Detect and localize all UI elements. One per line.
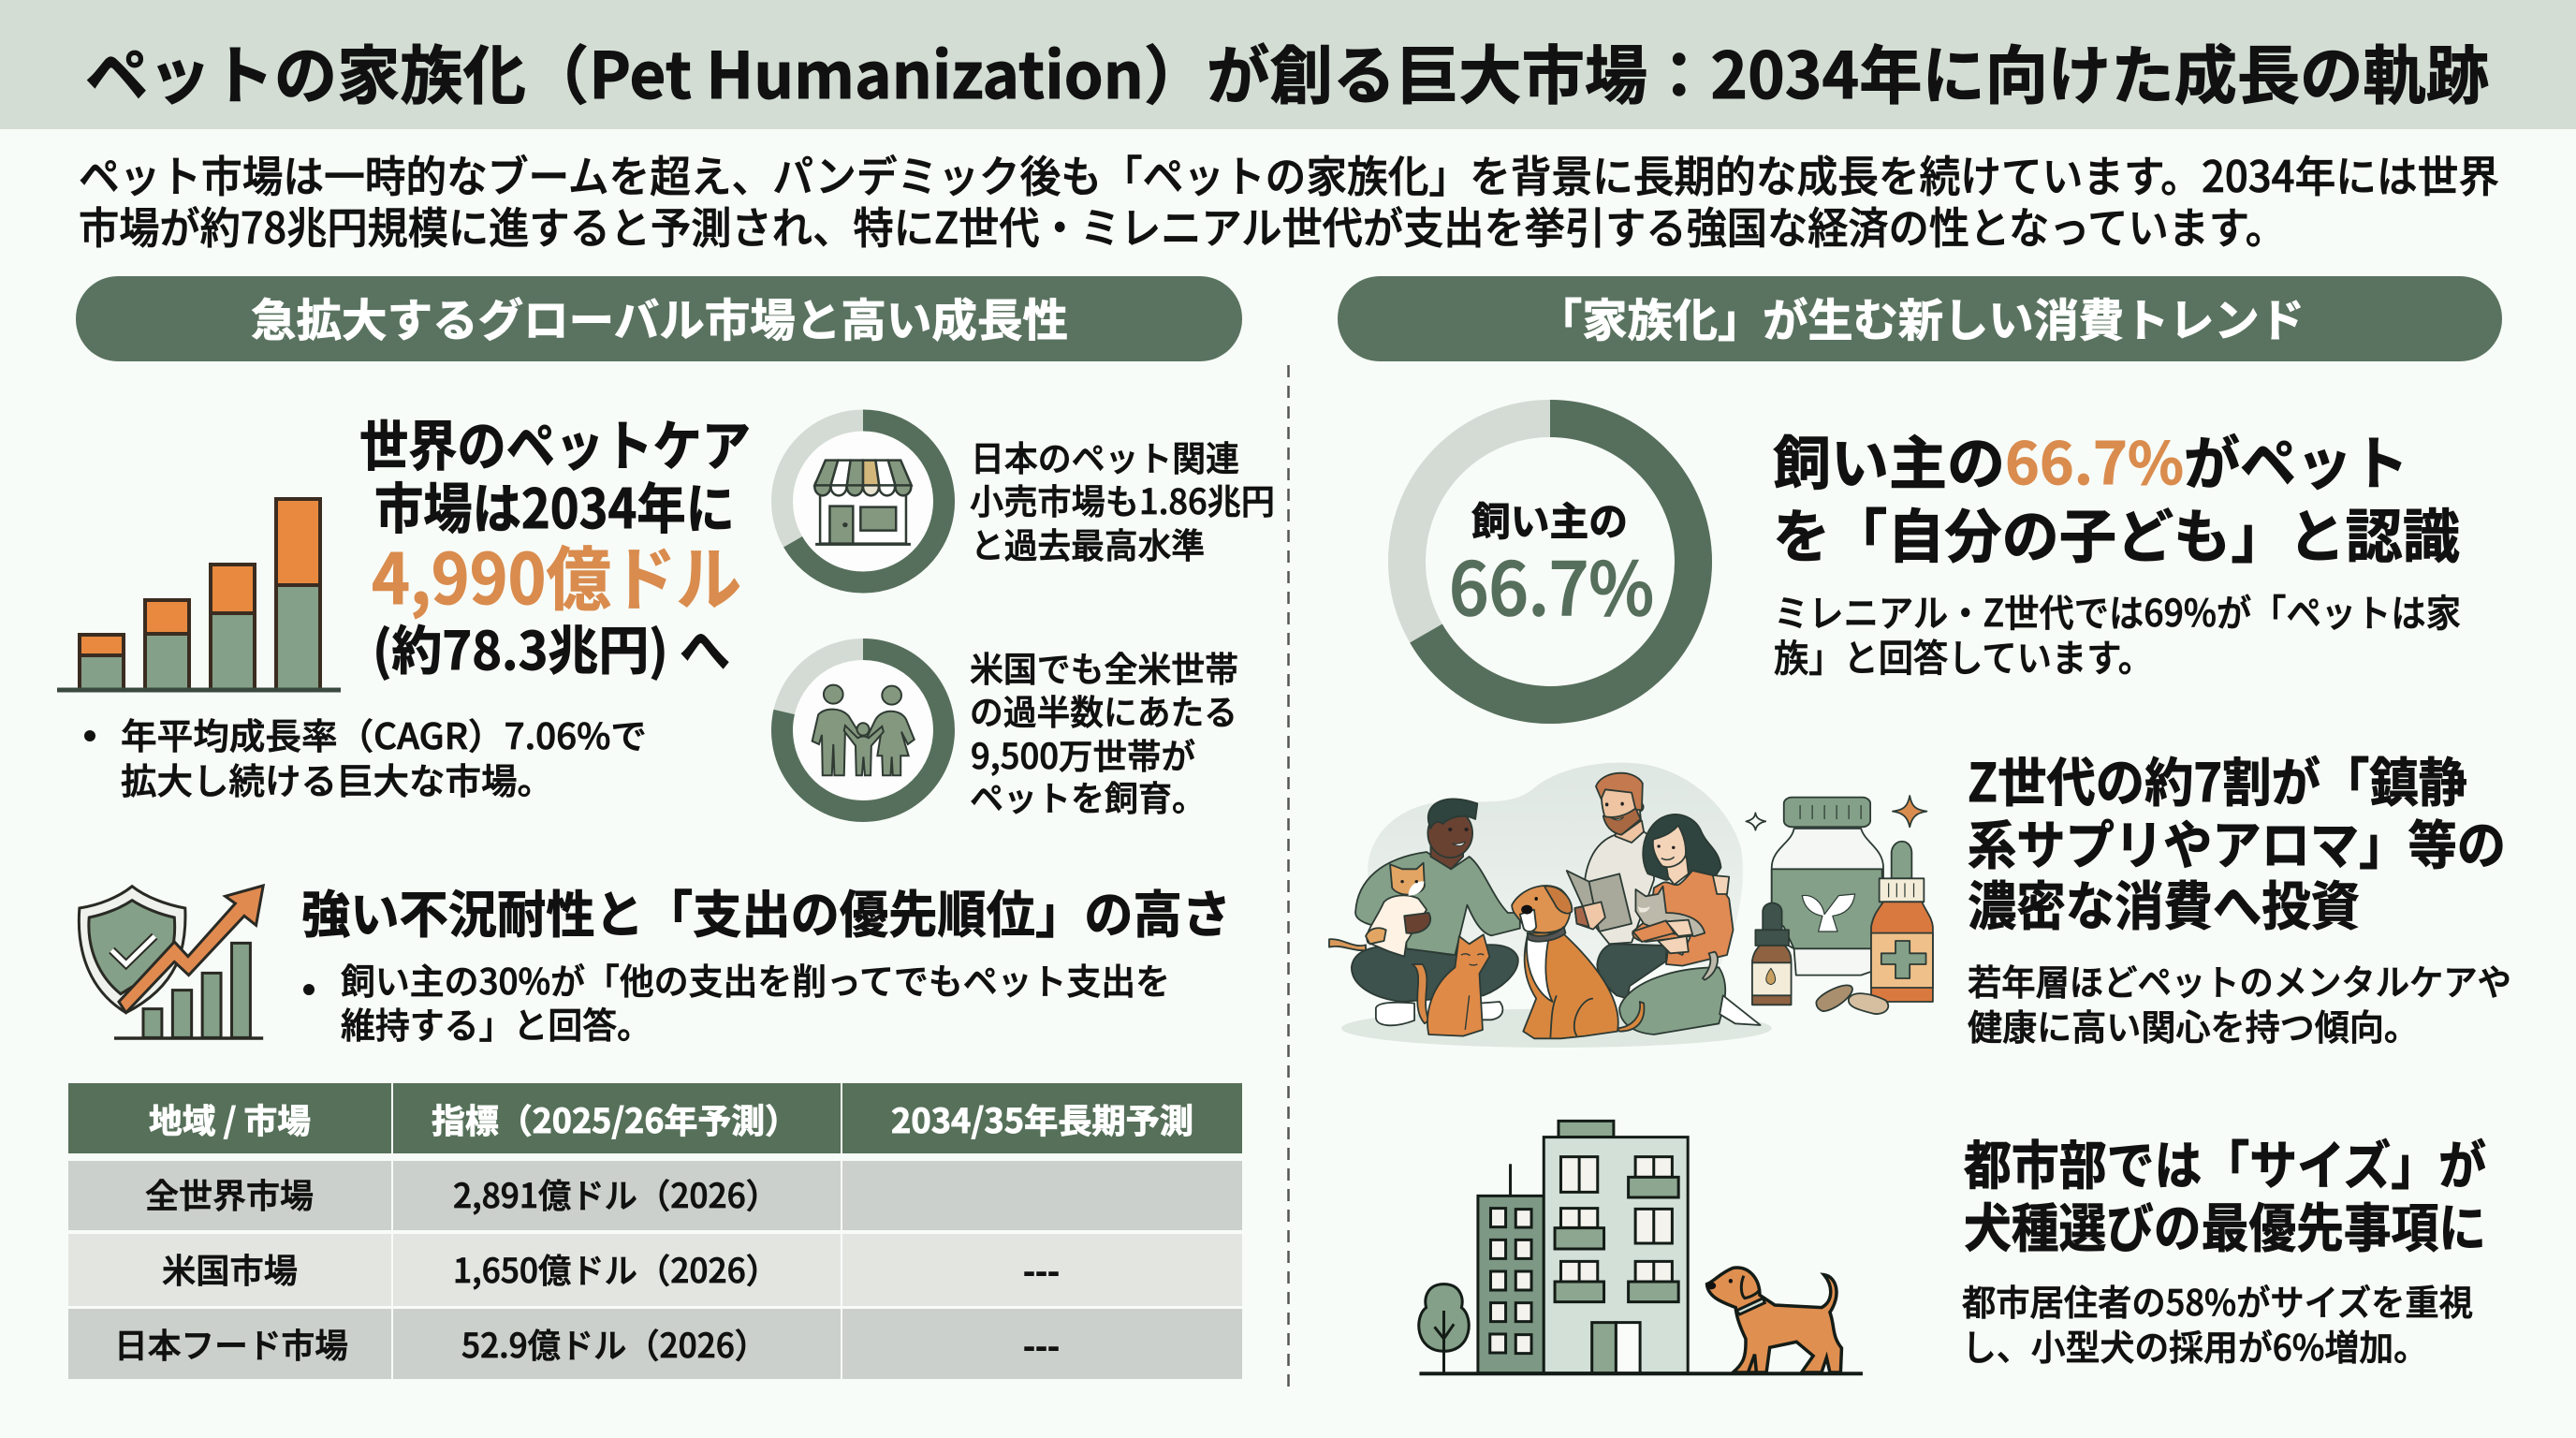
market size headline: 世界のペットケア [359, 403, 751, 481]
table row: US [68, 1234, 1242, 1306]
illustration: pet owners and supplements [1329, 763, 1933, 1048]
table: market forecast [68, 1083, 1242, 1379]
table row: Japan food: 日本フード市場 [114, 1319, 348, 1368]
text: US households: ペットを飼育。 [970, 770, 1206, 821]
person: man with cat [1329, 799, 1520, 1025]
intro text: 市場が約78兆円規模に進すると予測され、特にZ世代・ミレニアル世代が支出を挙引する強国な経済の性となっています。 [79, 195, 2286, 257]
text: Japan retail market: 小売市場も1.86兆円 [970, 474, 1275, 524]
heading: city dwellers: 犬種選びの最優先事項に [1964, 1187, 2486, 1263]
bullet: CAGR: 年平均成長率（CAGR）7.06%で [121, 708, 647, 759]
icon: shield and rising arrow [79, 886, 263, 1038]
resilience heading: 強い不況耐性と「支出の優先順位」の高さ [301, 873, 1231, 947]
bullet: CAGR [84, 708, 647, 804]
text: Japan retail market [970, 431, 1275, 568]
ring with store icon [771, 410, 955, 594]
supplement bottles [1746, 796, 1933, 1014]
text: millennial and Gen Z [1774, 583, 2461, 682]
text: Japan retail market: と過去最高水準 [971, 518, 1205, 568]
bullet: 30 percent: 飼い主の30%が「他の支出を削ってでもペット支出を [341, 953, 1170, 1005]
cat: orange sitting [1412, 934, 1489, 1036]
heading: 66.7 percent of owners: 66.7% [2005, 417, 2184, 501]
heading: 66.7 percent of owners: を「自分の子ども」と認識 [1773, 490, 2460, 574]
heading: 66.7 percent of owners: がペット [2184, 417, 2408, 501]
bullet: 30 percent: 維持する」と回答。 [341, 997, 651, 1049]
tall building [1544, 1121, 1688, 1373]
dog: large sitting [1512, 886, 1644, 1038]
heading: Gen Z supplements: 濃密な消費へ投資 [1968, 865, 2360, 941]
small building [1478, 1164, 1544, 1373]
bullet: CAGR: 拡大し続ける巨大な市場。 [121, 753, 553, 804]
ring with family icon [771, 638, 955, 822]
heading: Gen Z supplements: Z世代の約7割が「鎮静 [1968, 741, 2467, 817]
heading: city dwellers: 都市部では「サイズ」が [1964, 1124, 2486, 1200]
background blob [1341, 763, 1772, 1048]
heading: 66.7 percent of owners: 飼い主の [1773, 417, 2005, 501]
text: US households: 米国でも全米世帯 [970, 641, 1238, 692]
table row: US: --- [1023, 1245, 1060, 1294]
tree [1419, 1284, 1469, 1373]
text: urban residents [1962, 1274, 2473, 1371]
table row: Japan food: --- [1023, 1320, 1060, 1369]
text: US households: の過半数にあたる [970, 684, 1237, 735]
intro text [79, 143, 2499, 257]
large orange dropper [1871, 842, 1933, 1002]
text: millennial and Gen Z: 族」と回答しています。 [1774, 628, 2153, 682]
table row: US: 米国市場 [162, 1244, 298, 1293]
text: US households: 9,500万世帯が [971, 728, 1195, 779]
donut chart: 66.7 percent: 66.7% [1449, 532, 1654, 637]
bullet: 30 percent [303, 953, 1170, 1049]
text: Japan retail market: 日本のペット関連 [971, 431, 1239, 481]
icon: family [812, 685, 915, 775]
small dropper [1752, 903, 1792, 1005]
text: younger owners: 若年層ほどペットのメンタルケアや [1968, 954, 2511, 1005]
icon: store [814, 461, 912, 544]
section heading: global market [76, 276, 1242, 361]
table row: Japan food: 52.9億ドル（2026） [461, 1319, 768, 1368]
market size headline: (約78.3兆円) へ [373, 609, 730, 685]
text: US households [970, 641, 1238, 821]
table header row: 2034/35年長期予測 [891, 1094, 1193, 1143]
book [1567, 871, 1632, 932]
capsules [1816, 985, 1888, 1014]
text: millennial and Gen Z: ミレニアル・Z世代では69%が「ペットは家 [1774, 583, 2461, 638]
table row: world: 全世界市場 [145, 1169, 314, 1218]
illustration: city building, tree and dog [1419, 1121, 1863, 1373]
person: bearded man [1584, 773, 1666, 999]
text: younger owners [1968, 954, 2511, 1050]
header band with title: ペットの家族化（Pet Humanization）が創る巨大市場：2034年に向けた成長の軌跡 [85, 24, 2489, 117]
heading: 66.7 percent of owners [1773, 417, 2460, 574]
market size headline: 市場は2034年に [374, 465, 735, 544]
intro text: ペット市場は一時的なブームを超え、パンデミック後も「ペットの家族化」を背景に長期的な成長を続けています。2034年には世界 [79, 143, 2499, 205]
market size headline: 4,990億ドル [372, 524, 741, 624]
table header row: 地域 / 市場 [149, 1094, 311, 1143]
donut chart: 66.7 percent: 飼い主の [1471, 491, 1628, 548]
section heading: consumer trends [1338, 276, 2502, 361]
header band with title [0, 0, 2576, 129]
table header row: 指標（2025/26年予測） [432, 1094, 798, 1143]
table row: world: 2,891億ドル（2026） [453, 1169, 779, 1218]
sparkles [1893, 796, 1926, 827]
text: younger owners: 健康に高い関心を持つ傾向。 [1968, 999, 2419, 1050]
bar chart icon [57, 499, 341, 690]
table row: world [68, 1161, 1242, 1230]
dog [1706, 1268, 1841, 1372]
heading: Gen Z supplements [1968, 741, 2506, 941]
table row: US: 1,650億ドル（2026） [453, 1244, 779, 1293]
section heading: global market: 急拡大するグローバル市場と高い成長性 [251, 284, 1068, 349]
table row: Japan food [68, 1309, 1242, 1379]
section heading: consumer trends: 「家族化」が生む新しい消費トレンド [1537, 284, 2305, 349]
person: woman with gray cat [1619, 814, 1761, 1034]
heading: city dwellers [1964, 1124, 2486, 1263]
table header row [68, 1083, 1242, 1153]
heading: Gen Z supplements: 系サプリやアロマ」等の [1968, 804, 2506, 880]
text: urban residents: 都市居住者の58%がサイズを重視 [1962, 1274, 2473, 1326]
market size headline [359, 403, 751, 685]
text: urban residents: し、小型犬の採用が6%増加。 [1962, 1319, 2428, 1371]
donut chart: 66.7 percent [1407, 418, 1693, 705]
